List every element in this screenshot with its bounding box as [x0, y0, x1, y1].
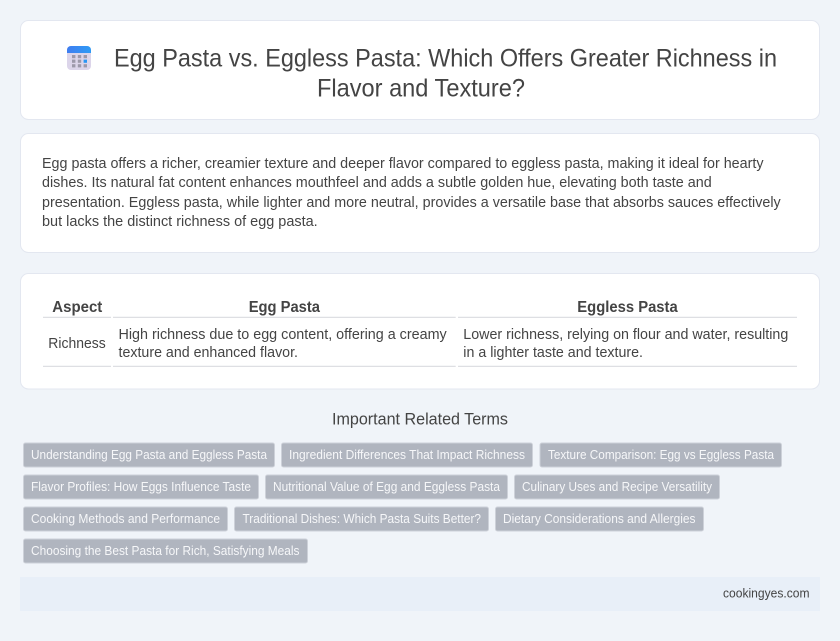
- tag: [24, 539, 308, 563]
- heading: important related terms: Important Related Terms: [332, 410, 508, 428]
- table row: richness: High richness due to egg content, offering a creamy: [118, 327, 447, 343]
- tag: [24, 475, 258, 499]
- table header: Egg Pasta: [249, 299, 320, 316]
- tag: Understanding Egg Pasta and Eggless Pasta: [31, 447, 268, 462]
- table header: Eggless Pasta: [577, 299, 678, 316]
- tag: Texture Comparison: Egg vs Eggless Pasta: [548, 447, 775, 462]
- heading: title: Egg Pasta vs. Eggless Pasta: Which Offers Greater Richness in: [114, 46, 777, 72]
- panel: summary text: but lacks the distinct richness of egg pasta.: [42, 213, 318, 230]
- panel: comparison table: [20, 274, 820, 389]
- tag: [282, 443, 532, 467]
- panel: summary text: dishes. Its natural fat content enhances mouthfeel and adds a subtle golden hue, elevating both taste and: [42, 174, 712, 191]
- tag: [540, 443, 782, 467]
- table row: richness: [48, 327, 788, 361]
- tag: [24, 443, 274, 467]
- table row: richness: Lower richness, relying on flour and water, resulting: [463, 327, 788, 343]
- tag: Cooking Methods and Performance: [31, 511, 220, 526]
- heading: title: [114, 46, 777, 102]
- tag: Flavor Profiles: How Eggs Influence Taste: [31, 479, 251, 494]
- panel: summary text: [20, 134, 820, 252]
- tag: Dietary Considerations and Allergies: [503, 511, 696, 526]
- tag: Traditional Dishes: Which Pasta Suits Better?: [242, 511, 481, 526]
- table row: richness: Richness: [48, 336, 106, 352]
- footer: [20, 577, 820, 611]
- tag: [24, 507, 228, 531]
- table row: richness: in a lighter taste and texture.: [463, 345, 643, 361]
- icon: calendar: [67, 46, 91, 70]
- tag: [266, 475, 508, 499]
- tag: Choosing the Best Pasta for Rich, Satisfying Meals: [31, 543, 300, 558]
- panel: summary text: Egg pasta offers a richer, creamier texture and deeper flavor compared to eggless pasta, making it ideal for hearty: [42, 155, 764, 172]
- tag list: related terms: [24, 443, 782, 563]
- tag: [514, 475, 720, 499]
- tag: [234, 507, 488, 531]
- tag: [496, 507, 704, 531]
- table header: Aspect: [52, 299, 102, 316]
- table header: [52, 299, 678, 316]
- tag: Ingredient Differences That Impact Richness: [289, 447, 525, 462]
- panel: title header: [20, 20, 820, 120]
- panel: summary text: presentation. Eggless pasta, while lighter and more neutral, provides a versatile base that absorbs sauces effectively: [42, 194, 781, 211]
- table row: richness: texture and enhanced flavor.: [118, 345, 298, 361]
- tag: Nutritional Value of Egg and Eggless Pasta: [273, 479, 501, 494]
- tag: Culinary Uses and Recipe Versatility: [522, 479, 713, 494]
- footer: cookingyes.com: [723, 587, 810, 601]
- heading: title: Flavor and Texture?: [317, 76, 525, 102]
